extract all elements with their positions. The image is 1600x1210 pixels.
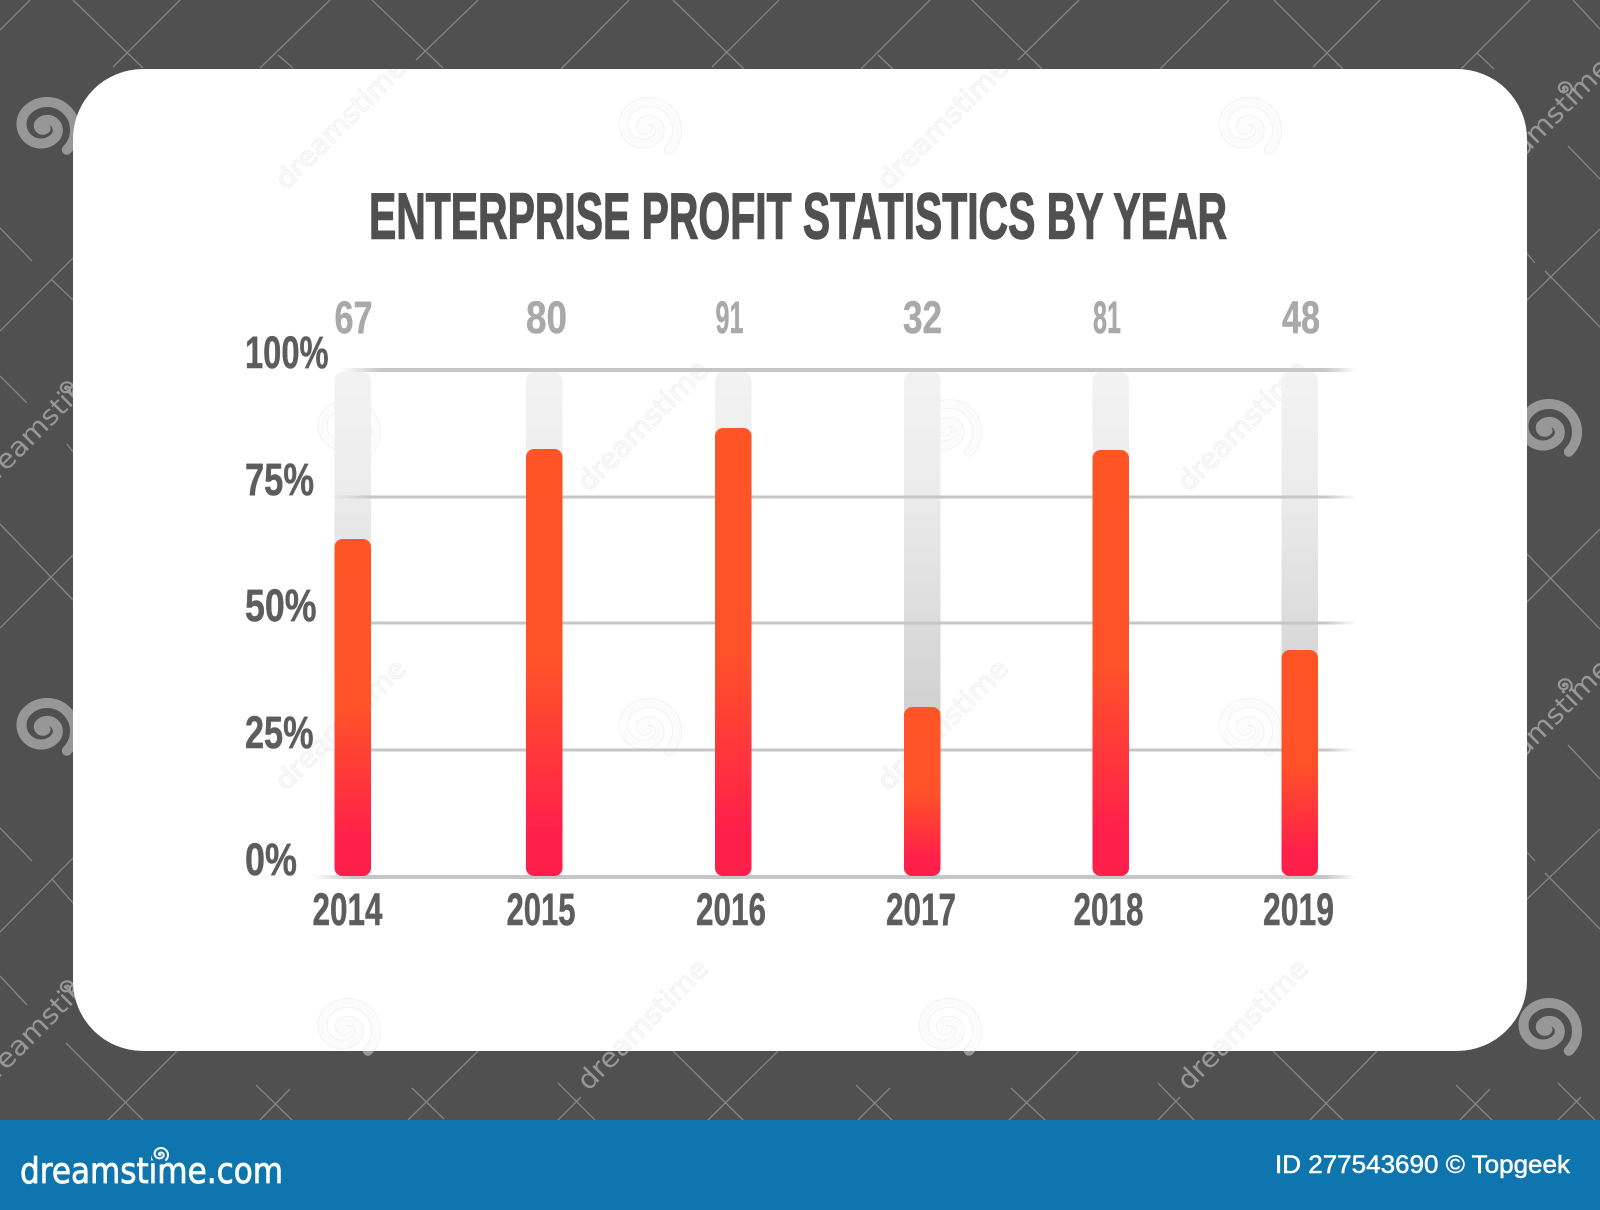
x-axis year labels: 2016: [696, 884, 766, 935]
value labels: 32: [903, 292, 942, 343]
faint watermarks on card: dreamstime: [871, 653, 1015, 797]
faint watermarks on card: [269, 52, 1315, 1097]
footer logo text: dreamstime.com: [20, 1151, 283, 1192]
y-axis labels: 75%: [245, 454, 314, 505]
value labels: 67: [334, 292, 372, 343]
x-axis year labels: 2014: [312, 884, 382, 935]
value labels: 48: [1282, 292, 1320, 343]
faint watermarks on card: dreamstime: [1171, 953, 1315, 1097]
watermark text on dark background: dreamstime: [571, 953, 715, 1097]
faint watermarks on card: dreamstime: [269, 52, 413, 196]
y-axis labels: 25%: [245, 707, 314, 758]
watermark logos on dark background: [13, 90, 1589, 1065]
bar 2019: 48: [1282, 650, 1318, 876]
icon: footer spiral: [152, 1145, 171, 1164]
value labels: 91: [716, 292, 744, 343]
y-axis labels: 0%: [245, 834, 297, 885]
bar chart: [245, 292, 1356, 935]
watermark text on dark background: dreamstime: [1171, 953, 1315, 1097]
panel: white chart card: [73, 52, 1527, 1097]
x-axis year labels: [312, 884, 1334, 935]
bar 2017: 32: [904, 707, 940, 876]
value labels: 80: [526, 292, 567, 343]
faint watermarks on card: dreamstime: [269, 653, 413, 797]
x-axis year labels: 2015: [506, 884, 576, 935]
faint watermarks on card: dreamstime: [1171, 354, 1315, 498]
bar 2015: 80: [526, 449, 562, 876]
footer bar: [0, 1120, 1600, 1210]
y-axis labels: 50%: [245, 580, 316, 631]
chart tracks: [334, 372, 1318, 876]
bar 2018: 81: [1092, 450, 1129, 876]
y-axis labels: 100%: [245, 327, 328, 378]
x-axis year labels: 2017: [886, 884, 956, 935]
x-axis year labels: 2019: [1263, 884, 1334, 935]
value labels: 81: [1093, 292, 1121, 343]
image id and credit: ID 277543690 © Topgeek: [1275, 1151, 1571, 1179]
faint watermarks on card: dreamstime: [871, 52, 1015, 196]
faint watermarks on card: dreamstime: [571, 953, 715, 1097]
x-axis year labels: 2018: [1074, 884, 1144, 935]
value labels: [334, 292, 1320, 343]
faint watermarks on card: dreamstime: [571, 354, 715, 498]
bar 2016: 91: [715, 428, 752, 876]
y-axis labels: [245, 327, 328, 885]
watermark small logos on dark background: [59, 79, 1575, 996]
bar 2014: 67: [334, 539, 371, 876]
